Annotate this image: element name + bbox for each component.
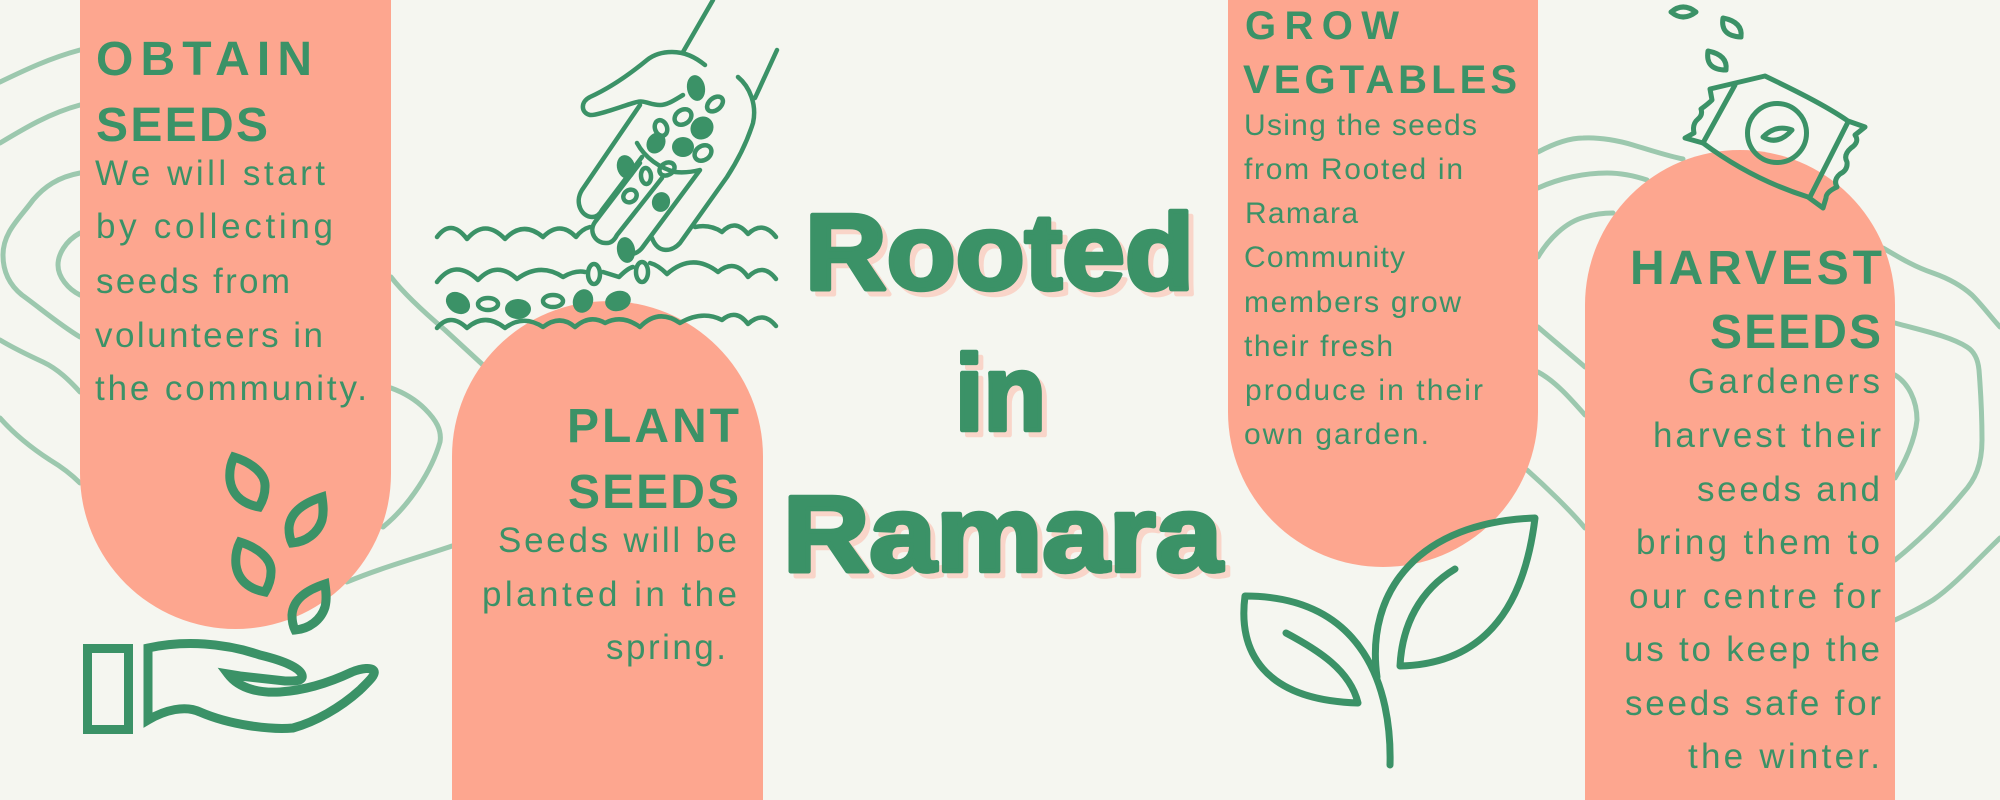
panel: obtain seeds background <box>80 0 391 629</box>
body: grow vegetables: from Rooted in <box>1244 153 1463 186</box>
body: grow vegetables: produce in their <box>1245 374 1483 407</box>
panel: harvest seeds background <box>1585 150 1895 800</box>
heading: obtain seeds: SEEDS <box>96 99 268 152</box>
heading: grow vegetables: VEGTABLES <box>1243 58 1517 102</box>
text block: obtain seeds <box>95 33 367 408</box>
body: obtain seeds: by collecting <box>96 207 333 246</box>
body: grow vegetables: Ramara <box>1245 197 1358 230</box>
heading: harvest seeds: HARVEST <box>1630 242 1882 295</box>
heading: grow vegetables <box>1243 4 1517 102</box>
body: plant seeds: spring. <box>606 628 726 667</box>
body: harvest seeds: the winter. <box>1688 737 1880 776</box>
body: harvest seeds: us to keep the <box>1624 630 1880 669</box>
body: grow vegetables <box>1244 109 1483 451</box>
body: plant seeds: planted in the <box>482 575 737 614</box>
body: grow vegetables: Using the seeds <box>1244 109 1477 142</box>
title: Ramara <box>783 473 1223 594</box>
text block: harvest seeds <box>1624 242 1882 776</box>
heading: plant seeds: PLANT <box>567 400 739 453</box>
icon: falling seeds over open hand <box>88 457 374 730</box>
body: harvest seeds: our centre for <box>1629 577 1881 616</box>
body: grow vegetables: their fresh <box>1244 330 1393 363</box>
text block: plant seeds <box>482 400 739 667</box>
body: grow vegetables: Community <box>1244 241 1405 274</box>
body: grow vegetables: own garden. <box>1244 418 1429 451</box>
panel: plant seeds background <box>452 301 763 800</box>
panel: grow vegetables background <box>1228 0 1538 567</box>
body: obtain seeds <box>95 154 367 408</box>
body: harvest seeds: Gardeners <box>1688 362 1880 401</box>
body: harvest seeds <box>1624 362 1881 776</box>
icon: hand planting seeds in soil <box>437 0 777 328</box>
text block: grow vegetables <box>1243 4 1517 451</box>
body: obtain seeds: the community. <box>95 369 367 408</box>
heading: harvest seeds: SEEDS <box>1710 306 1881 359</box>
heading: harvest seeds <box>1630 242 1882 359</box>
body: obtain seeds: seeds from <box>96 262 290 301</box>
heading: obtain seeds <box>96 33 312 152</box>
icon: sprout with two leaves <box>1244 518 1535 765</box>
title: in <box>955 332 1046 453</box>
icon: seed packet with falling seeds <box>1671 7 1865 208</box>
body: obtain seeds: We will start <box>95 154 325 193</box>
heading: obtain seeds: OBTAIN <box>96 33 312 86</box>
heading: plant seeds: SEEDS <box>568 466 739 519</box>
body: grow vegetables: members grow <box>1244 286 1461 319</box>
body: harvest seeds: harvest their <box>1653 416 1881 455</box>
body: plant seeds <box>482 521 737 667</box>
title: Rooted <box>805 191 1194 312</box>
title <box>783 191 1223 594</box>
body: harvest seeds: seeds and <box>1697 470 1880 509</box>
heading: grow vegetables: GROW <box>1245 4 1399 48</box>
body: harvest seeds: bring them to <box>1636 523 1880 562</box>
body: harvest seeds: seeds safe for <box>1625 684 1881 723</box>
body: plant seeds: Seeds will be <box>498 521 737 560</box>
body: obtain seeds: volunteers in <box>95 316 323 355</box>
heading: plant seeds <box>567 400 739 519</box>
